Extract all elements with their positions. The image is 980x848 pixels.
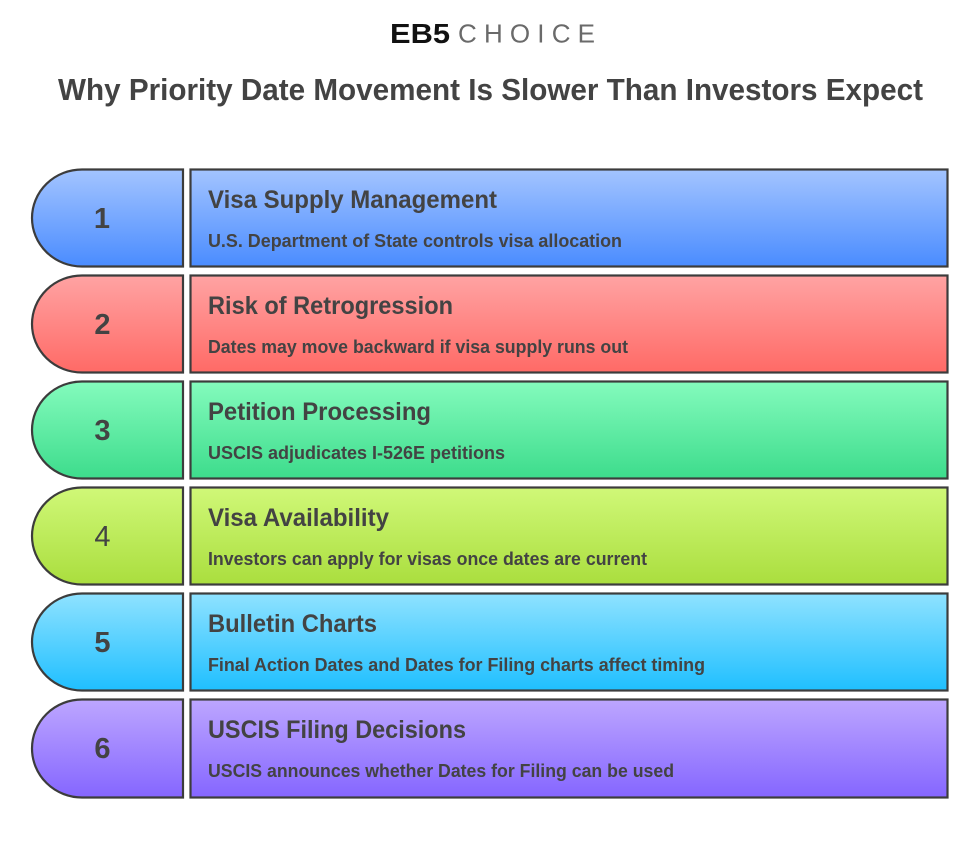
panel 2: Dates may move backward if visa supply runs out (208, 337, 628, 357)
panel 4: Investors can apply for visas once dates are current (208, 549, 647, 569)
row 1: Visa Supply Management (32, 170, 948, 266)
number tab 6: 6 (94, 733, 111, 765)
panel 5: Final Action Dates and Dates for Filing charts affect timing (208, 655, 705, 675)
number tab 3 (32, 382, 183, 478)
logo: EB5 Choice: CHOICE (458, 18, 595, 48)
panel 6: USCIS Filing Decisions (208, 716, 466, 744)
row 2: Risk of Retrogression (32, 276, 948, 372)
title: Why Priority Date Movement Is Slower Than Investors Expect (58, 72, 923, 107)
number tab 2 (32, 276, 183, 372)
row 5: Bulletin Charts (32, 594, 948, 690)
panel 4 (190, 488, 948, 584)
panel 6: USCIS announces whether Dates for Filing can be used (208, 761, 674, 781)
panel 5 (190, 594, 948, 690)
panel 3: USCIS adjudicates I-526E petitions (208, 443, 505, 463)
logo: EB5 Choice: EB5 (390, 18, 450, 49)
panel 1: U.S. Department of State controls visa allocation (208, 231, 622, 251)
number tab 4: 4 (94, 521, 111, 553)
logo: EB5 Choice (390, 18, 595, 49)
panel 1: Visa Supply Management (208, 186, 498, 214)
panel 3: Petition Processing (208, 398, 431, 426)
number tab 6 (32, 700, 183, 798)
number tab 4 (32, 488, 183, 584)
row 3: Petition Processing (32, 382, 948, 478)
row 4: Visa Availability (32, 488, 948, 584)
panel 1 (190, 170, 948, 266)
number tab 1 (32, 170, 183, 266)
number tab 5 (32, 594, 183, 690)
panel 4: Visa Availability (208, 504, 389, 532)
panel 2 (190, 276, 948, 372)
number tab 5: 5 (94, 627, 111, 659)
panel 5: Bulletin Charts (208, 610, 377, 638)
number tab 1: 1 (94, 203, 110, 235)
panel 3 (190, 382, 948, 478)
number tab 3: 3 (94, 415, 111, 447)
row 6: USCIS Filing Decisions (32, 700, 948, 798)
number tab 2: 2 (94, 309, 111, 341)
panel 6 (190, 700, 948, 798)
panel 2: Risk of Retrogression (208, 292, 453, 320)
